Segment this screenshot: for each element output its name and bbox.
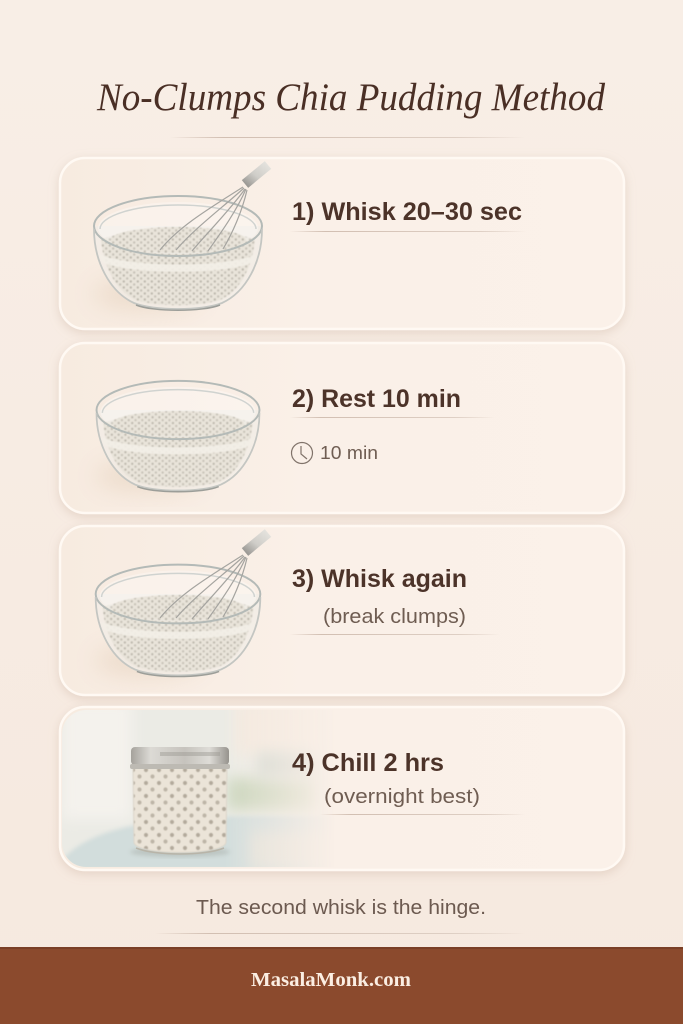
icon: bowl resting bbox=[96, 381, 259, 492]
panel: step 2 rest bbox=[60, 343, 624, 513]
icon: clock bbox=[292, 442, 312, 464]
website label: MasalaMonk.com bbox=[251, 969, 411, 991]
title: No-Clumps Chia Pudding Method bbox=[96, 76, 605, 119]
time label: 10 min bbox=[320, 443, 378, 463]
icon: chia jar bbox=[130, 747, 230, 857]
panel: step 4 chill bbox=[60, 700, 624, 870]
step 2 heading: 2) Rest 10 min bbox=[292, 385, 461, 413]
panel: step 3 whisk again bbox=[60, 526, 624, 695]
panel: step 1 whisk bbox=[60, 158, 624, 329]
step 4 heading: 4) Chill 2 hrs bbox=[292, 749, 444, 777]
step 4 note: (overnight best) bbox=[324, 786, 480, 808]
footer band bbox=[0, 947, 683, 1024]
step 3 note: (break clumps) bbox=[323, 606, 466, 628]
step 1 heading: 1) Whisk 20–30 sec bbox=[292, 198, 522, 226]
step 3 heading: 3) Whisk again bbox=[292, 565, 467, 593]
fridge photo background bbox=[62, 710, 313, 867]
icon: bowl with whisk bbox=[95, 533, 268, 677]
closing note: The second whisk is the hinge. bbox=[196, 897, 486, 919]
icon: bowl with whisk bbox=[93, 165, 268, 310]
